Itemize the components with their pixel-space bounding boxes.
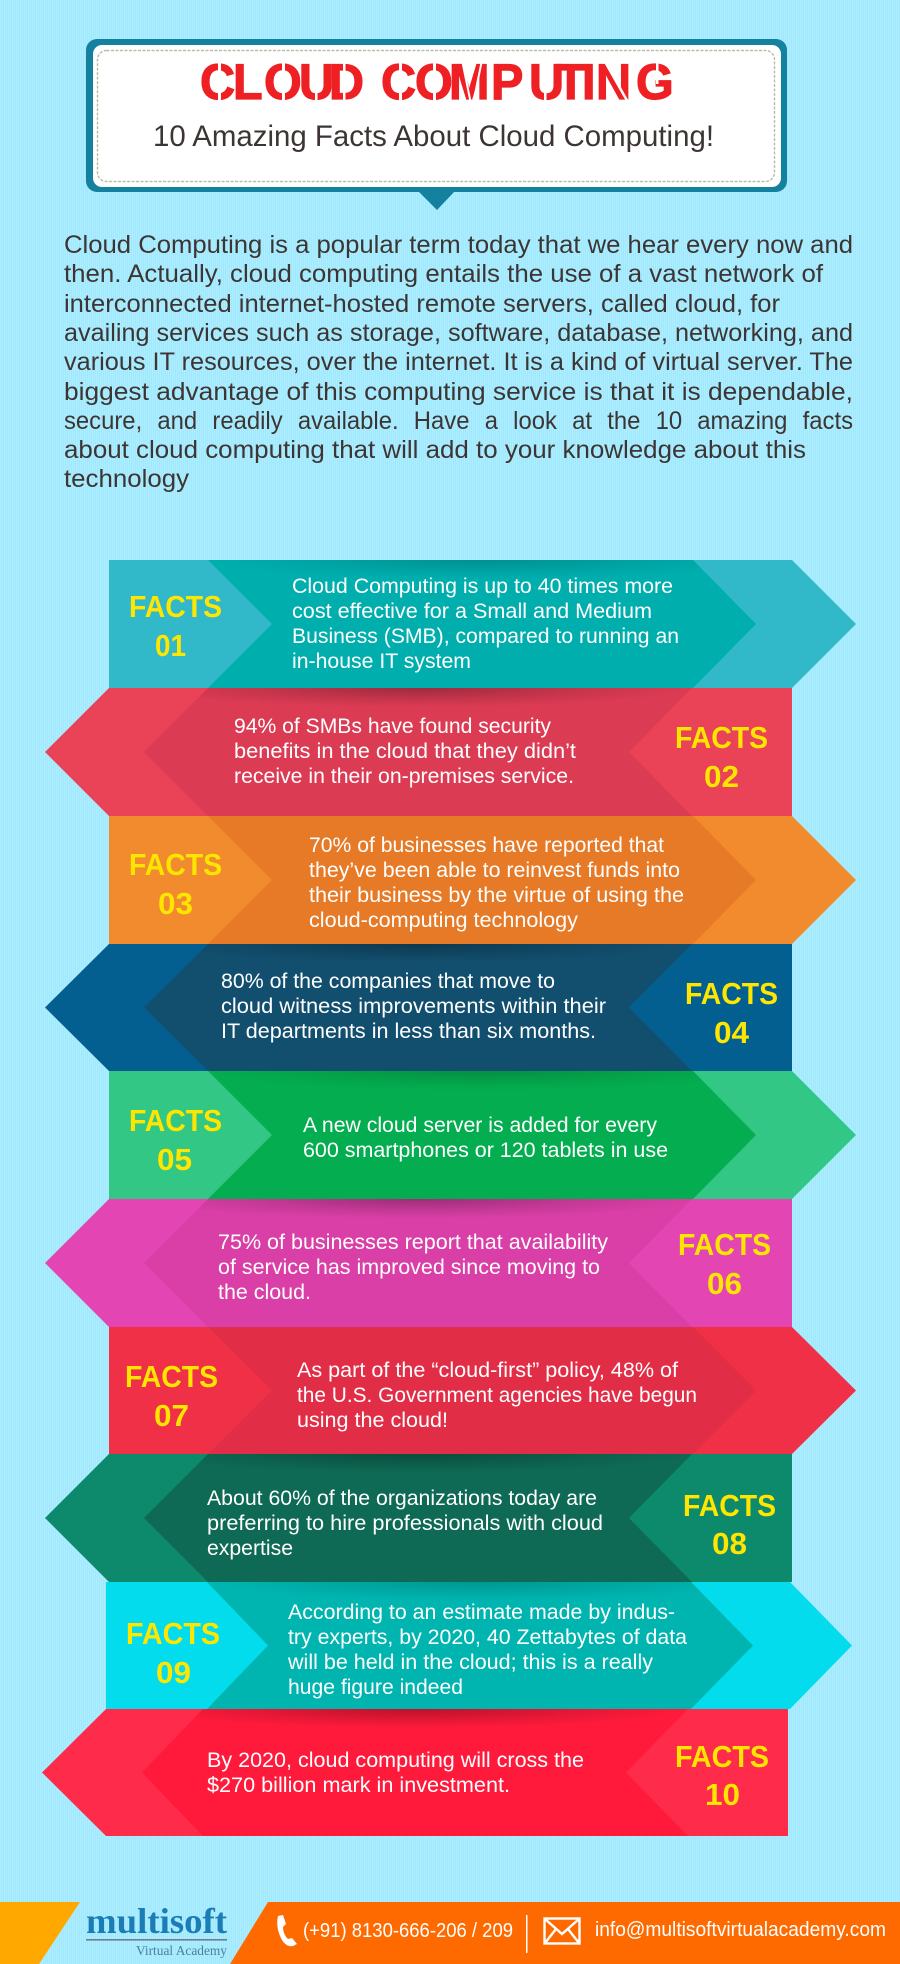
inner chevron — [142, 1709, 688, 1836]
arrow band — [45, 1199, 792, 1327]
fact text: cloud-computing technology — [309, 908, 578, 932]
fact text: About 60% of the organizations today are — [207, 1486, 597, 1510]
arrow band — [45, 944, 792, 1071]
fact label — [126, 1616, 220, 1690]
inner chevron — [144, 944, 692, 1071]
arrow band — [45, 1454, 792, 1582]
fact text: Cloud Computing is up to 40 times more — [292, 574, 673, 598]
panel: fact 10 — [42, 1709, 788, 1836]
fact label — [685, 976, 778, 1050]
panel: fact 06 — [45, 1199, 792, 1327]
footer — [0, 1901, 900, 1964]
fact text — [292, 574, 679, 673]
fact label — [129, 589, 222, 663]
fact text — [221, 969, 606, 1043]
fact text: A new cloud server is added for every — [303, 1113, 657, 1137]
fact label: FACTS — [675, 720, 768, 755]
phone number: (+91) 8130-666-206 / 209 — [303, 1920, 513, 1942]
fact label — [675, 720, 768, 794]
fact text: will be held in the cloud; this is a really — [287, 1650, 653, 1674]
intro paragraph: interconnected internet-hosted remote servers, called cloud, for — [64, 290, 780, 318]
fact label: 09 — [156, 1655, 191, 1690]
fact text: benefits in the cloud that they didn’t — [234, 739, 576, 763]
fact text: By 2020, cloud computing will cross the — [207, 1748, 584, 1772]
fact label: FACTS — [126, 1616, 220, 1651]
fact text: try experts, by 2020, 40 Zettabytes of data — [288, 1625, 687, 1649]
fact text: 80% of the companies that move to — [221, 969, 555, 993]
intro paragraph: about cloud computing that will add to your knowledge about this — [64, 436, 806, 464]
fact label: 06 — [707, 1266, 742, 1301]
fact text: huge figure indeed — [288, 1675, 463, 1699]
inner chevron — [208, 560, 756, 688]
fact text: According to an estimate made by indus- — [288, 1600, 675, 1624]
fact label: FACTS — [683, 1488, 776, 1523]
panel: fact 08 — [45, 1454, 792, 1582]
arrow band — [45, 688, 792, 816]
fact text: 75% of businesses report that availability — [218, 1230, 608, 1254]
intro paragraph: secure, and readily available. Have a look at the 10 amazing facts — [64, 407, 853, 435]
fact label: 03 — [158, 886, 193, 921]
fact text: their business by the virtue of using the — [309, 883, 684, 907]
fact text: 70% of businesses have reported that — [309, 833, 664, 857]
logo — [86, 1901, 227, 1959]
inner chevron — [208, 816, 756, 944]
fact label: FACTS — [129, 847, 222, 882]
intro paragraph — [64, 231, 853, 493]
fact label: 07 — [154, 1398, 189, 1433]
fact label: FACTS — [685, 976, 778, 1011]
intro paragraph: biggest advantage of this computing service is that it is dependable, — [64, 378, 853, 406]
divider — [526, 1915, 528, 1953]
intro paragraph: Cloud Computing is a popular term today that we hear every now and — [64, 231, 853, 259]
panel: fact 02 — [45, 688, 792, 816]
fact text: using the cloud! — [297, 1408, 448, 1432]
fact text — [218, 1230, 608, 1304]
fact label: 01 — [155, 628, 186, 663]
panel: fact 04 — [45, 944, 792, 1071]
fact text: IT departments in less than six months. — [221, 1019, 596, 1043]
fact label: 04 — [714, 1015, 750, 1050]
logo: multisoft — [86, 1901, 227, 1941]
fact text: the U.S. Government agencies have begun — [297, 1383, 697, 1407]
fact label: 10 — [705, 1777, 740, 1812]
panel: fact 09 — [106, 1582, 852, 1709]
fact label: 05 — [157, 1142, 192, 1177]
fact label — [675, 1739, 769, 1812]
fact label: 02 — [704, 759, 739, 794]
fact text: 94% of SMBs have found security — [234, 714, 551, 738]
icon: phone — [277, 1915, 297, 1946]
title: Cloud Computing: CLOUD COMPUTING — [200, 54, 674, 110]
subtitle: 10 Amazing Facts About Cloud Computing! — [153, 120, 714, 153]
panel: fact 07 — [109, 1327, 856, 1454]
fact text: $270 billion mark in investment. — [207, 1773, 510, 1797]
fact text — [207, 1486, 603, 1560]
fact text: receive in their on-premises service. — [234, 764, 574, 788]
arrow band — [109, 816, 856, 944]
title box inner panel — [93, 45, 781, 187]
intro paragraph: then. Actually, cloud computing entails the use of a vast network of — [64, 260, 823, 288]
panel: fact 05 — [109, 1071, 856, 1199]
arrow band — [109, 1327, 856, 1454]
arrow band — [106, 1582, 852, 1709]
dashed inner outline — [98, 50, 774, 182]
email address: info@multisoftvirtualacademy.com — [595, 1919, 886, 1941]
intro paragraph: technology — [64, 465, 190, 493]
inner chevron — [208, 1071, 756, 1199]
inner chevron — [144, 1199, 692, 1327]
panel: fact 03 — [109, 816, 856, 944]
fact label — [683, 1488, 776, 1561]
title box — [86, 39, 787, 210]
intro paragraph: various IT resources, over the internet. It is a kind of virtual server. The — [64, 348, 853, 376]
fact text — [207, 1748, 584, 1797]
fact text: expertise — [207, 1536, 293, 1560]
footer orange bar — [230, 1902, 900, 1964]
fact text: cost effective for a Small and Medium — [292, 599, 652, 623]
panel: fact 01 — [109, 560, 856, 688]
fact text: of service has improved since moving to — [218, 1255, 600, 1279]
fact text: cloud witness improvements within their — [221, 994, 606, 1018]
fact text: they’ve been able to reinvest funds into — [309, 858, 680, 882]
fact label: FACTS — [129, 1103, 222, 1138]
fact text: the cloud. — [218, 1280, 311, 1304]
fact text — [303, 1113, 668, 1162]
inner chevron — [207, 1582, 753, 1709]
fact label: FACTS — [125, 1359, 218, 1394]
inner chevron — [144, 1454, 692, 1582]
inner chevron — [144, 688, 692, 816]
inner chevron — [208, 1327, 756, 1454]
fact text — [309, 833, 684, 932]
fact text: As part of the “cloud-first” policy, 48% of — [297, 1358, 678, 1382]
fact label — [125, 1359, 218, 1433]
arrow band — [109, 560, 856, 688]
footer yellow accent — [0, 1902, 80, 1964]
icon: envelope — [544, 1918, 580, 1944]
fact label: 08 — [712, 1526, 747, 1561]
fact text: in-house IT system — [292, 649, 471, 673]
fact text: 600 smartphones or 120 tablets in use — [303, 1138, 668, 1162]
callout pointer — [418, 191, 455, 210]
fact label — [129, 847, 222, 921]
arrow band — [42, 1709, 788, 1836]
arrow band — [109, 1071, 856, 1199]
fact label — [129, 1103, 222, 1177]
fact text — [297, 1358, 697, 1432]
title box frame — [86, 39, 787, 192]
intro paragraph: availing services such as storage, software, database, networking, and — [64, 319, 853, 347]
fact label: FACTS — [678, 1227, 771, 1262]
fact label: FACTS — [675, 1739, 769, 1774]
logo: Virtual Academy — [136, 1944, 227, 1959]
fact text — [234, 714, 576, 788]
fact text: Business (SMB), compared to running an — [292, 624, 679, 648]
fact text: preferring to hire professionals with cloud — [207, 1511, 603, 1535]
fact label — [678, 1227, 771, 1301]
fact text — [287, 1600, 687, 1699]
fact label: FACTS — [129, 589, 222, 624]
